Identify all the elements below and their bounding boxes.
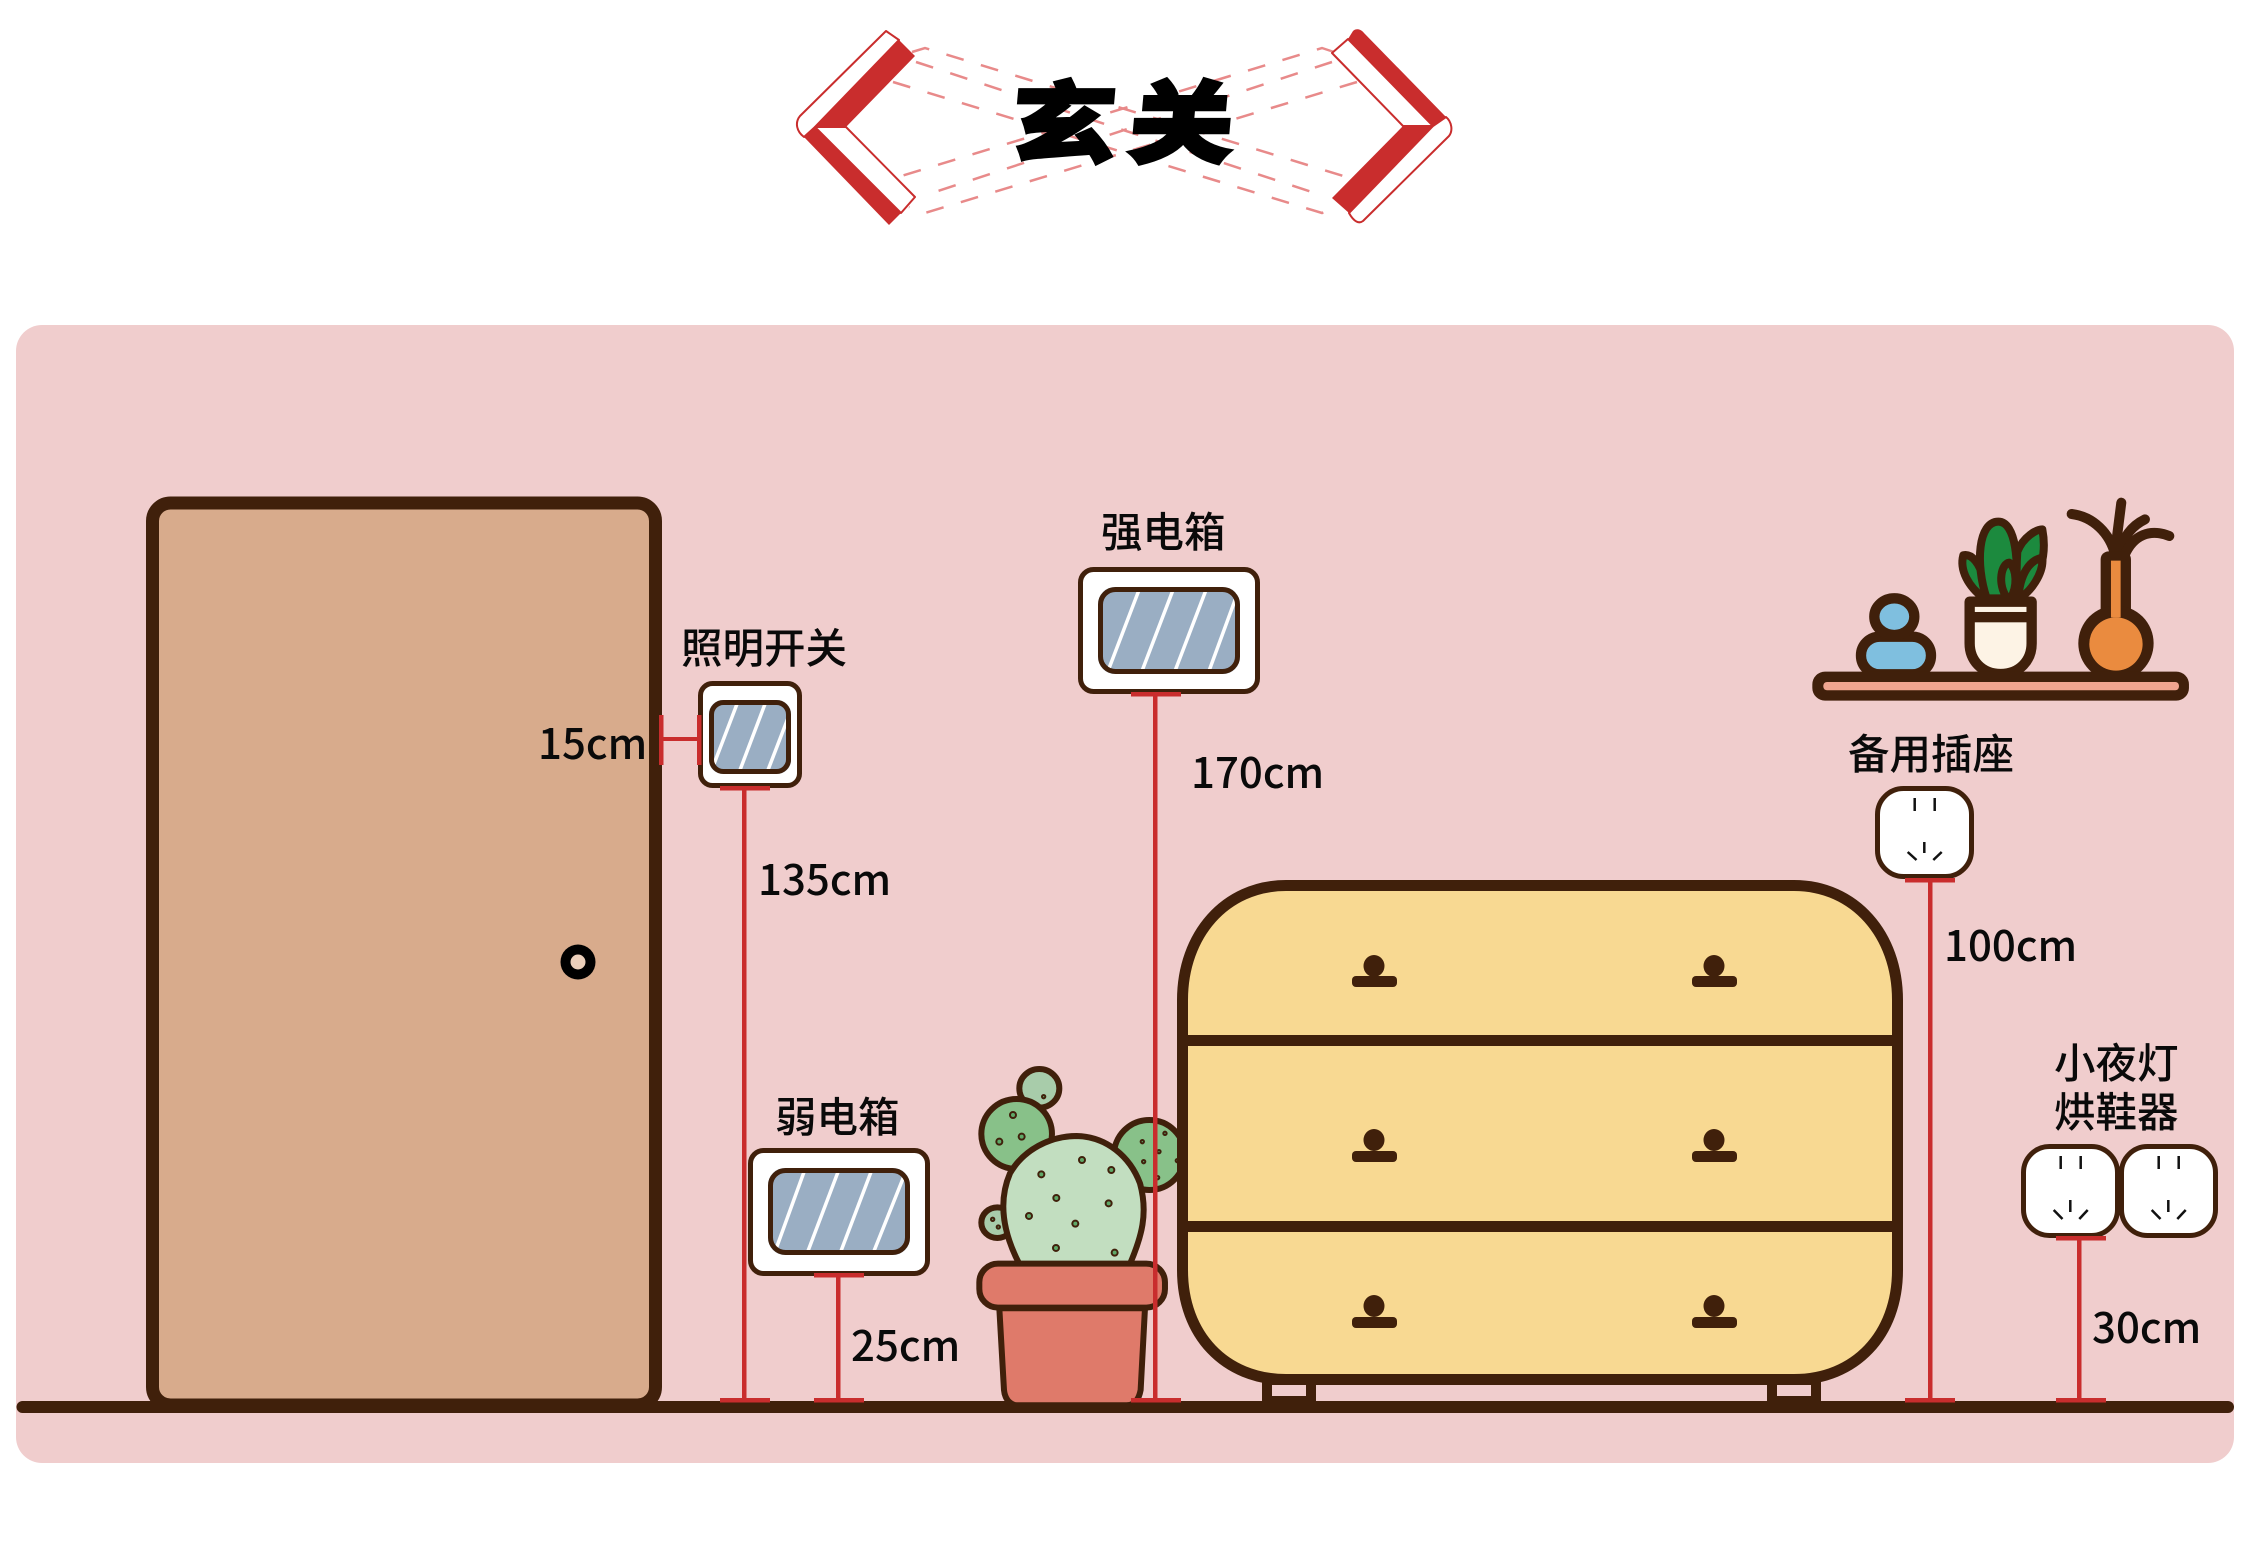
dimension: 135cm bbox=[720, 786, 770, 1402]
chest body bbox=[1182, 886, 1898, 1380]
drawer dividers bbox=[1178, 1035, 1902, 1232]
floor line bbox=[16, 1401, 2234, 1413]
chest of drawers bbox=[1178, 886, 1902, 1401]
value: 170cm: 170cm bbox=[1191, 740, 1324, 801]
lighting switch bbox=[700, 684, 800, 786]
value: 100cm: 100cm bbox=[1944, 913, 2077, 974]
shoe dryer socket bbox=[2122, 1146, 2216, 1236]
cactus spines bbox=[991, 1095, 1179, 1256]
orange vase bbox=[2072, 503, 2169, 681]
door bbox=[152, 503, 656, 1405]
icon: door knob bbox=[560, 944, 596, 980]
right chevron bbox=[1332, 29, 1451, 222]
cactus pads bbox=[981, 1069, 1185, 1264]
drawer handles bbox=[1352, 955, 1737, 1328]
label: weak current box: 弱电箱 bbox=[775, 1084, 900, 1144]
value: 30cm: 30cm bbox=[2092, 1295, 2201, 1356]
label: night light and shoe dryer: 烘鞋器 bbox=[2054, 1079, 2179, 1139]
stacked stones bbox=[1861, 598, 1931, 674]
chest feet bbox=[1267, 1380, 1816, 1401]
dimension: 25cm bbox=[814, 1273, 864, 1402]
left chevron bbox=[797, 31, 915, 225]
value: 135cm: 135cm bbox=[758, 847, 891, 908]
title text: 玄关 bbox=[1007, 51, 1240, 181]
title banner bbox=[797, 29, 1451, 225]
label: spare socket: 备用插座 bbox=[1848, 721, 2014, 781]
value: 25cm: 25cm bbox=[851, 1313, 960, 1374]
dimension: 15cm from door bbox=[659, 715, 702, 765]
pot bbox=[979, 1264, 1165, 1405]
potted plant bbox=[1962, 522, 2044, 674]
shelf board bbox=[1812, 672, 2189, 701]
dimension: 30cm bbox=[2056, 1236, 2106, 1402]
label: lighting switch: 照明开关 bbox=[681, 615, 847, 675]
panel: entryway wall bbox=[16, 325, 2234, 1463]
value: 15cm: 15cm bbox=[538, 711, 647, 772]
wall shelf with ornaments bbox=[1812, 503, 2189, 701]
label: night light and shoe dryer: 小夜灯 bbox=[2054, 1030, 2179, 1090]
strong current box bbox=[1080, 570, 1258, 692]
spare socket bbox=[1878, 788, 1972, 876]
label: night light and shoe dryer bbox=[2054, 1030, 2179, 1139]
dimension: 170cm bbox=[1131, 692, 1181, 1402]
weak current box bbox=[750, 1150, 928, 1274]
dimension: 100cm bbox=[1905, 878, 1955, 1402]
cactus in pot bbox=[979, 1069, 1185, 1405]
night light socket bbox=[2024, 1146, 2118, 1236]
label: strong current box: 强电箱 bbox=[1101, 499, 1226, 559]
